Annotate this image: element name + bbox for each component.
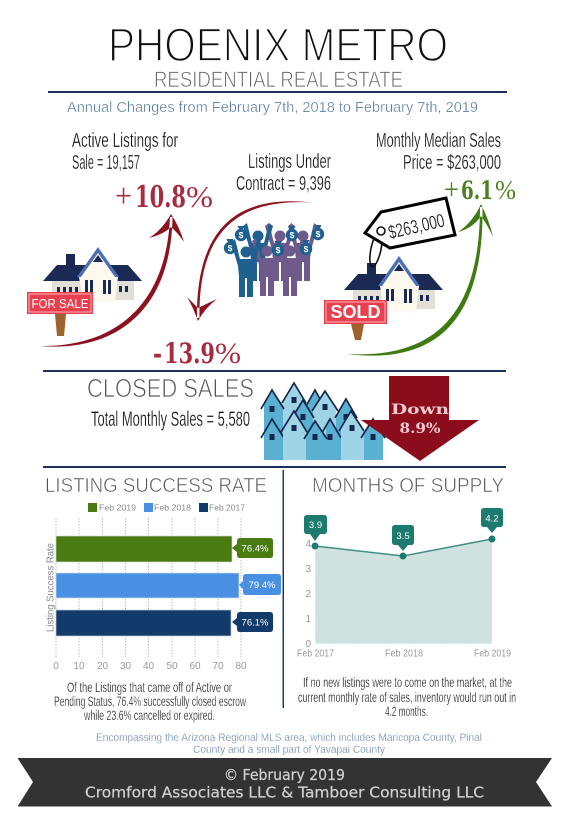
panel: listing success rate: [44, 474, 281, 723]
bar chart: listing success rate: 76.4%: [242, 544, 269, 554]
bar chart: listing success rate: 79.4%: [249, 580, 276, 591]
bar chart: listing success rate: 10: [73, 661, 85, 672]
arrow: closed sales down: [361, 376, 479, 461]
arrow: under contract down: [187, 201, 312, 321]
active listings label: Sale = 19,157: [72, 152, 140, 174]
area chart: months of supply: 1: [305, 614, 311, 625]
bar chart: listing success rate: 70: [212, 661, 224, 672]
under contract change: 13.9: [164, 337, 215, 370]
coverage note: [96, 732, 482, 756]
legend: Feb 2019: [99, 502, 136, 512]
bar chart: listing success rate: 80: [235, 661, 247, 672]
bar chart: listing success rate: 60: [189, 661, 201, 672]
footer ribbon: [18, 758, 552, 806]
median price label: Monthly Median Sales: [376, 130, 501, 152]
footer ribbon: Cromford Associates LLC & Tamboer Consulting LLC: [85, 784, 484, 802]
area chart: months of supply: 3: [305, 564, 311, 575]
bar chart: listing success rate: 30: [120, 661, 131, 672]
panel: months of supply: [297, 474, 516, 719]
median price label: Price = $263,000: [403, 152, 501, 174]
active listings label: Active Listings for: [72, 130, 178, 152]
bar chart: listing success rate: 0: [53, 661, 59, 672]
area chart: months of supply: [297, 508, 511, 660]
median price change: %: [495, 175, 516, 205]
title: PHOENIX METRO: [108, 19, 448, 72]
icon: sold sign: [324, 300, 387, 340]
icon: price tag: [365, 198, 455, 268]
bar chart: listing success rate: 40: [143, 661, 154, 672]
arrow: median price up: [347, 204, 493, 356]
area chart: months of supply: Feb 2019: [474, 648, 511, 660]
date range subheading: Annual Changes from February 7th, 2018 to February 7th, 2019: [67, 99, 478, 116]
area chart: months of supply: 2: [305, 589, 311, 600]
median price change: +: [444, 173, 459, 206]
coverage note: Encompassing the Arizona Regional MLS area, which includes Maricopa County, Pinal: [96, 732, 482, 744]
subtitle: RESIDENTIAL REAL ESTATE: [154, 67, 403, 92]
closed sales change: 8.9%: [400, 421, 440, 437]
bar chart: listing success rate: 76.1%: [242, 618, 269, 628]
area chart: months of supply: 3.5: [396, 531, 410, 542]
panel: active listings: [27, 130, 213, 347]
active listings change: 10.8: [135, 180, 186, 215]
icon: people holding money bags: [224, 223, 324, 297]
panel: median sales price: [324, 130, 516, 356]
icon: price tag: $263,000: [386, 211, 447, 244]
listing success rate heading: LISTING SUCCESS RATE: [45, 474, 267, 497]
under contract change: -: [153, 337, 162, 370]
total monthly sales: Total Monthly Sales = 5,580: [91, 408, 250, 431]
coverage note: County and a small part of Yavapai County: [193, 744, 385, 756]
icon: sold sign: SOLD: [330, 302, 380, 322]
area chart: months of supply: 4: [305, 539, 311, 550]
under contract label: [236, 151, 331, 195]
bar chart: listing success rate: [44, 518, 281, 672]
closed sales heading: CLOSED SALES: [87, 375, 254, 403]
area chart: months of supply: 3.9: [309, 520, 322, 531]
area chart: months of supply: 4.2: [485, 514, 499, 524]
active listings change: +: [115, 178, 132, 215]
icon: sold house: [344, 256, 443, 311]
listing success caption: Pending Status, 76.4% successfully closed escrow: [54, 693, 247, 709]
median price label: [376, 130, 501, 174]
footer ribbon: © February 2019: [224, 766, 345, 784]
area chart: months of supply: Feb 2017: [297, 648, 334, 660]
area chart: months of supply: 0: [305, 639, 311, 650]
median price change: [444, 173, 516, 206]
listing success caption: Of the Listings that came off of Active or: [67, 679, 232, 695]
months of supply caption: 4.2 months.: [385, 703, 428, 719]
listing success caption: [54, 679, 247, 723]
legend: Feb 2017: [209, 502, 245, 512]
legend: [88, 502, 245, 512]
icon: cluster of houses: [261, 383, 385, 460]
months of supply heading: MONTHS OF SUPPLY: [312, 474, 504, 497]
closed sales change: [391, 402, 449, 437]
icon: for sale sign: [27, 292, 93, 336]
closed sales change: Down: [391, 402, 449, 418]
bar chart: listing success rate: 20: [97, 661, 108, 672]
arrow: active listings up: [40, 214, 184, 347]
icon: house for sale: [43, 247, 142, 302]
area chart: months of supply: Feb 2018: [385, 648, 423, 660]
under contract label: Listings Under: [248, 151, 331, 173]
panel: listings under contract: [153, 151, 331, 370]
legend: Feb 2018: [154, 502, 191, 512]
active listings change: %: [186, 179, 213, 214]
active listings label: [72, 130, 178, 174]
under contract label: Contract = 9,396: [236, 173, 331, 195]
bar chart: listing success rate: 50: [166, 661, 178, 672]
panel: closed sales: [87, 375, 479, 461]
median price change: 6.1: [461, 176, 493, 205]
months of supply caption: [298, 674, 516, 719]
icon: for sale sign: FOR SALE: [32, 296, 89, 311]
listing success caption: while 23.6% cancelled or expired.: [83, 707, 215, 723]
bar chart: listing success rate: Listing Success Rate: [44, 543, 56, 632]
under contract change: %: [215, 337, 241, 370]
